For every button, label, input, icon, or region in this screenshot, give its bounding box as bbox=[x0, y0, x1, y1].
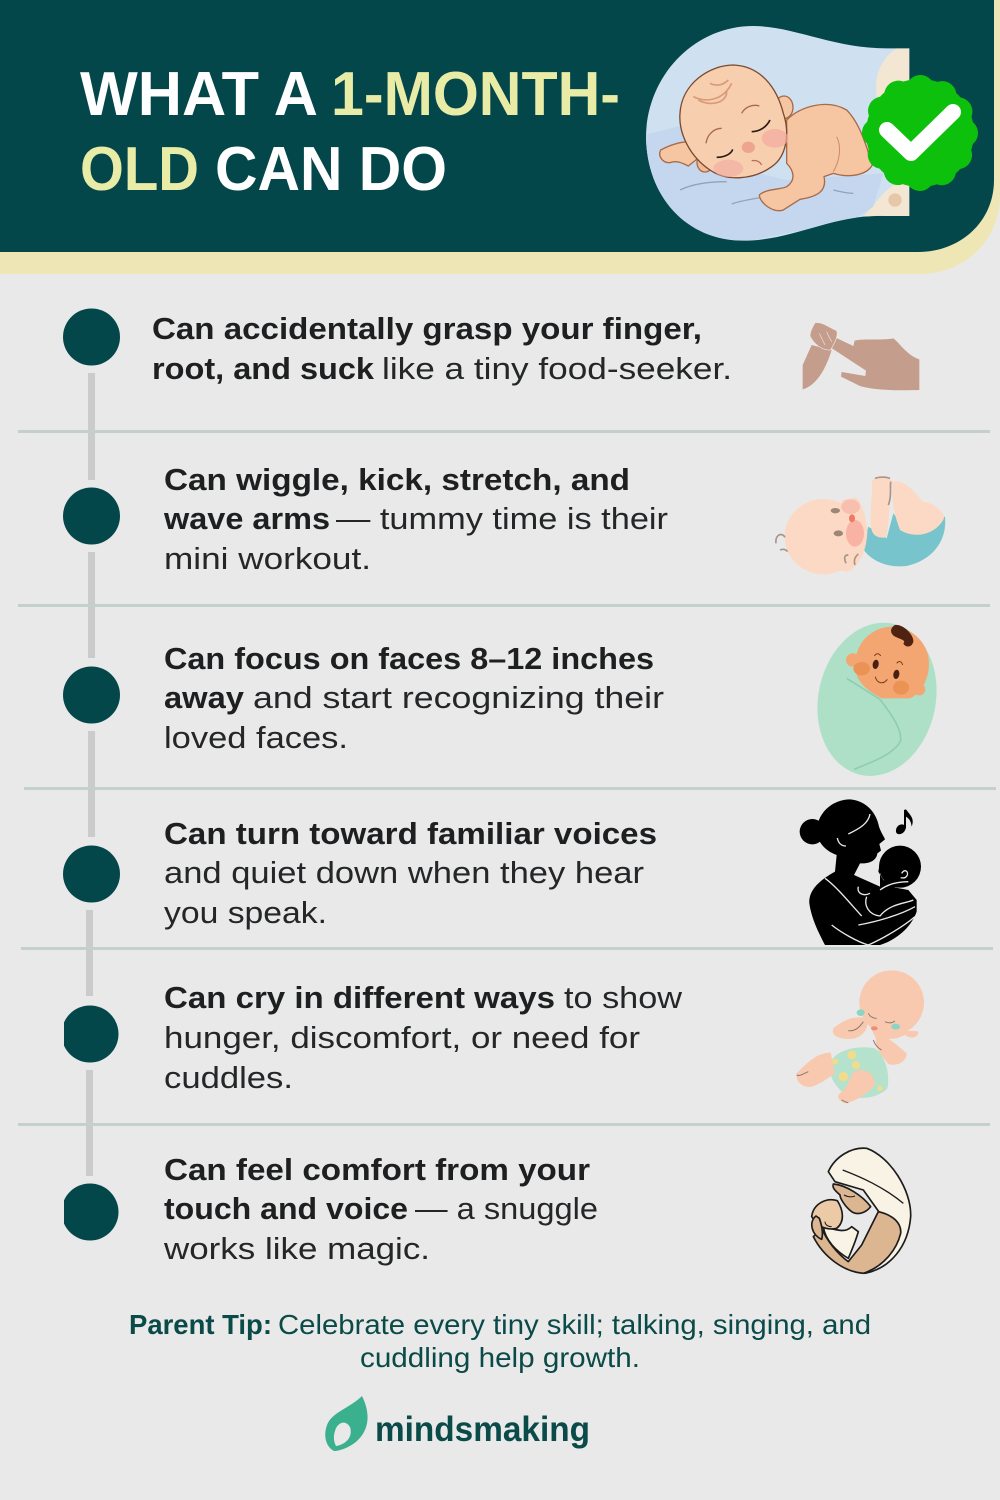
item 5 text bbox=[164, 980, 683, 1095]
item 6 text bbox=[163, 1152, 598, 1266]
icon: baby kicking legs bbox=[776, 477, 945, 574]
icon: swaddled baby bbox=[804, 611, 950, 787]
item 2 text: Can wiggle, kick, stretch, and bbox=[164, 462, 630, 497]
item 2 text: wave arms bbox=[163, 501, 330, 536]
icon: green check badge bbox=[866, 79, 974, 187]
item 5 text: to show bbox=[564, 980, 683, 1015]
parent tip callout: Celebrate every tiny skill; talking, singing, and bbox=[278, 1309, 871, 1340]
item 6 text: touch and voice bbox=[164, 1191, 408, 1226]
item 5 text: Can cry in different ways bbox=[164, 980, 555, 1015]
item 2 text bbox=[163, 462, 668, 576]
item 2 text: — tummy time is their bbox=[336, 501, 668, 536]
logo: mindsmaking: mindsmaking bbox=[375, 1410, 590, 1449]
title bbox=[80, 60, 620, 204]
item 3 text: away bbox=[164, 680, 245, 715]
item 6 text: works like magic. bbox=[163, 1231, 430, 1266]
parent tip callout: cuddling help growth. bbox=[360, 1342, 640, 1373]
parent tip callout: Parent Tip: bbox=[129, 1309, 272, 1340]
icon: crying baby bbox=[796, 970, 924, 1103]
item 1 text: Can accidentally grasp your finger, bbox=[152, 311, 702, 346]
item 3 text bbox=[164, 641, 664, 755]
item 4 text: Can turn toward familiar voices bbox=[164, 816, 657, 851]
item 5 text: hunger, discomfort, or need for bbox=[164, 1020, 640, 1055]
title: OLD bbox=[80, 135, 199, 204]
title: CAN DO bbox=[215, 135, 447, 204]
item 3 text: and start recognizing their bbox=[253, 680, 664, 715]
title: 1-MONTH- bbox=[331, 60, 620, 129]
item 6 text: — a snuggle bbox=[415, 1191, 598, 1226]
item 5 text: cuddles. bbox=[164, 1060, 293, 1095]
icon: mother singing to baby silhouette bbox=[800, 799, 921, 945]
parent tip callout bbox=[129, 1309, 871, 1373]
item 4 text: and quiet down when they hear bbox=[164, 855, 644, 890]
item 1 text: root, and suck bbox=[152, 351, 375, 386]
illustration: sleeping baby on tummy bbox=[640, 26, 909, 247]
header banner bbox=[0, 0, 1000, 274]
item 6 text: Can feel comfort from your bbox=[164, 1152, 590, 1187]
item 1 text bbox=[152, 311, 732, 386]
item 1 text: like a tiny food-seeker. bbox=[382, 351, 732, 386]
item 4 text: you speak. bbox=[164, 895, 327, 930]
item 2 text: mini workout. bbox=[164, 541, 371, 576]
item 3 text: Can focus on faces 8–12 inches bbox=[164, 641, 654, 676]
title: WHAT A bbox=[80, 60, 318, 129]
row dividers bbox=[18, 430, 996, 1126]
timeline connector bars bbox=[86, 373, 95, 1176]
icon: baby hand grasping finger bbox=[803, 323, 919, 390]
item 3 text: loved faces. bbox=[164, 720, 348, 755]
icon: mother embracing baby bbox=[812, 1148, 911, 1273]
item 4 text bbox=[164, 816, 657, 930]
logo: mindsmaking bbox=[325, 1396, 590, 1451]
timeline dots bbox=[62, 308, 120, 1240]
